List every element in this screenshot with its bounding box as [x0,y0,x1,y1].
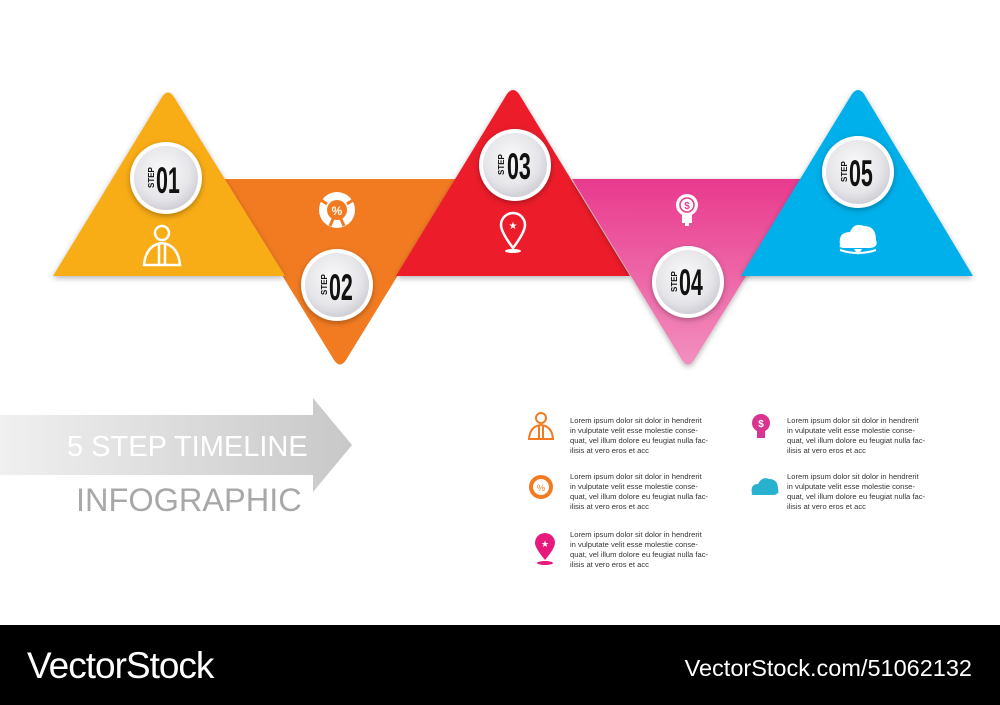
triangle: step 01 yellow [53,92,285,276]
legend: bulb: quat, vel illum dolore eu feugiat nulla fac- [787,436,926,445]
footer bar [0,625,1000,705]
legend: pin: in vulputate velit esse molestie conse- [570,540,698,549]
icon: location pin: ★ [509,221,518,232]
triangle: step 04 pink [572,179,806,364]
legend: pin [535,530,709,569]
subtitle: INFOGRAPHIC [76,482,302,518]
legend: pin: ★ [541,539,549,549]
legend: cloud: in vulputate velit esse molestie conse- [787,482,915,491]
icon: percent [319,192,355,228]
legend: percent: in vulputate velit esse molestie conse- [570,482,698,491]
icon: cloud [840,225,877,255]
legend: bulb: $ [758,419,764,430]
legend: person: Lorem ipsum dolor sit dolor in hendrerit [570,416,703,425]
circle: step 03 [479,129,551,201]
icon: bulb dollar: $ [684,201,690,212]
triangle: step 03 red [396,90,630,276]
circle: step 01: STEP [147,166,156,188]
icon: person [144,226,180,265]
legend: bulb: in vulputate velit esse molestie conse- [787,426,915,435]
legend: bulb: Lorem ipsum dolor sit dolor in hendrerit [787,416,920,425]
icon: percent: % [332,204,343,218]
circle: step 02: 02 [329,268,353,309]
legend: pin: quat, vel illum dolore eu feugiat nulla fac- [570,550,709,559]
circle: step 02: STEP [320,273,329,295]
legend: cloud [752,472,926,511]
triangle: step 05 blue [741,90,973,276]
legend: person [529,413,709,455]
circle: step 02 [301,249,373,321]
legend: percent: ilisis at vero eros et acc [570,502,649,511]
legend: person: ilisis at vero eros et acc [570,446,649,455]
legend: cloud: Lorem ipsum dolor sit dolor in hendrerit [787,472,920,481]
legend: percent: Lorem ipsum dolor sit dolor in hendrerit [570,472,703,481]
circle: step 05 [822,136,894,208]
circle: step 03: 03 [507,147,531,188]
legend: person: in vulputate velit esse molestie conse- [570,426,698,435]
triangle: step 02 orange [223,179,457,364]
circle: step 01 [130,142,202,214]
legend: bulb: ilisis at vero eros et acc [787,446,866,455]
icon: bulb dollar [676,194,698,226]
legend: cloud: ilisis at vero eros et acc [787,502,866,511]
legend: percent: % [537,483,545,493]
circle: step 03: STEP [497,153,506,175]
arrow banner: 5 STEP TIMELINE [67,431,308,463]
circle: step 05: STEP [840,160,849,182]
circle: step 04: STEP [670,270,679,292]
circle: step 01: 01 [156,161,180,202]
legend: pin: Lorem ipsum dolor sit dolor in hendrerit [570,530,703,539]
legend: pin: ilisis at vero eros et acc [570,560,649,569]
arrow banner [0,398,352,492]
legend: percent [531,472,709,511]
footer bar: VectorStock.com/51062132 [685,655,972,681]
legend: cloud: quat, vel illum dolore eu feugiat nulla fac- [787,492,926,501]
legend: percent: quat, vel illum dolore eu feugiat nulla fac- [570,492,709,501]
legend: bulb [752,414,926,455]
legend: person: quat, vel illum dolore eu feugiat nulla fac- [570,436,709,445]
circle: step 05: 05 [849,154,873,195]
circle: step 04: 04 [679,263,703,304]
icon: location pin [501,213,525,253]
circle: step 04 [652,246,724,318]
footer bar: VectorStock [27,645,215,686]
